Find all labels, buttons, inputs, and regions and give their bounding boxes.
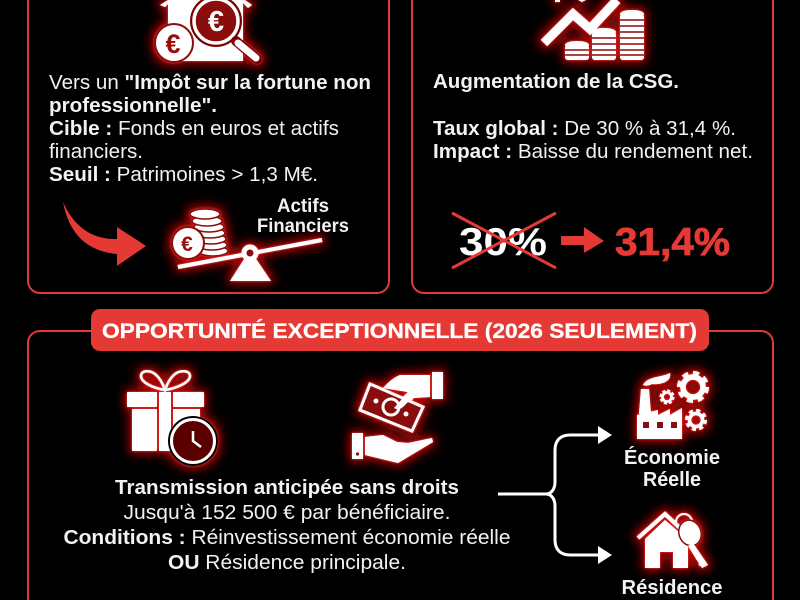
- text block: transmission: Transmission anticipée sans droits: [115, 476, 459, 499]
- icon: rising chart and coin stacks: [544, 0, 644, 60]
- label: actifs financiers: Financiers: [257, 216, 349, 237]
- text block: left description: [49, 71, 371, 186]
- text block: transmission: OU Résidence principale.: [168, 551, 406, 574]
- icon: house with magnifier and euro coin: €: [165, 29, 181, 59]
- panel border bottom: [28, 331, 773, 600]
- panel: augmentation de la CSG: [412, 0, 773, 293]
- text block: left description: Vers un "Impôt sur la fortune non: [49, 71, 371, 94]
- arrow: branching to two options: [498, 426, 612, 564]
- icon: house with magnifier and euro coin: €: [208, 6, 224, 38]
- text block: right description: Impact : Baisse du rendement net.: [433, 140, 753, 163]
- icon: balance with coins: [172, 209, 322, 281]
- text block: left description: Seuil : Patrimoines > 1,3 M€.: [49, 163, 318, 186]
- label: actifs financiers: [257, 196, 349, 237]
- old rate: crossed out 30%: [452, 213, 556, 268]
- text block: transmission: Jusqu'à 152 500 € par bénéficiaire.: [124, 501, 450, 524]
- panel border right: [412, 0, 773, 293]
- panel: impôt sur la fortune non professionnelle: [28, 0, 389, 293]
- old rate: crossed out 30%: 30%: [459, 221, 547, 264]
- text block: transmission: Conditions : Réinvestissement économie réelle: [64, 526, 510, 549]
- banner heading: OPPORTUNITÉ EXCEPTIONNELLE (2026 SEULEMENT): [102, 320, 697, 343]
- text block: right description: Taux global : De 30 % à 31,4 %.: [433, 117, 736, 140]
- label: actifs financiers: Actifs: [277, 196, 329, 217]
- text block: left description: Cible : Fonds en euros et actifs: [49, 117, 339, 140]
- banner heading: [91, 309, 709, 351]
- text block: transmission: [64, 476, 510, 574]
- text block: right description: [433, 70, 753, 163]
- label: économie réelle: Économie: [624, 446, 720, 469]
- icon: balance with coins: €: [181, 233, 193, 256]
- icon: house with magnifier and euro coin: [155, 0, 257, 62]
- text block: left description: financiers.: [49, 140, 143, 163]
- label: résidence: Résidence: [622, 577, 722, 599]
- icon: hands exchanging banknote: [352, 372, 443, 463]
- text block: left description: professionnelle".: [49, 94, 217, 117]
- arrow: to new rate: [561, 227, 604, 253]
- new rate 31,4%: 31,4%: [615, 221, 730, 264]
- icon: factory with gears: [637, 373, 707, 439]
- panel: opportunité exceptionnelle: [28, 309, 773, 600]
- icon: house with key: [638, 514, 708, 568]
- label: économie réelle: Réelle: [643, 469, 701, 491]
- panel border left: [28, 0, 389, 293]
- text block: right description: Augmentation de la CSG.: [433, 70, 679, 93]
- icon: gift with clock: [127, 371, 218, 466]
- arrow: curved red arrow: [63, 202, 146, 266]
- label: économie réelle: [624, 446, 720, 491]
